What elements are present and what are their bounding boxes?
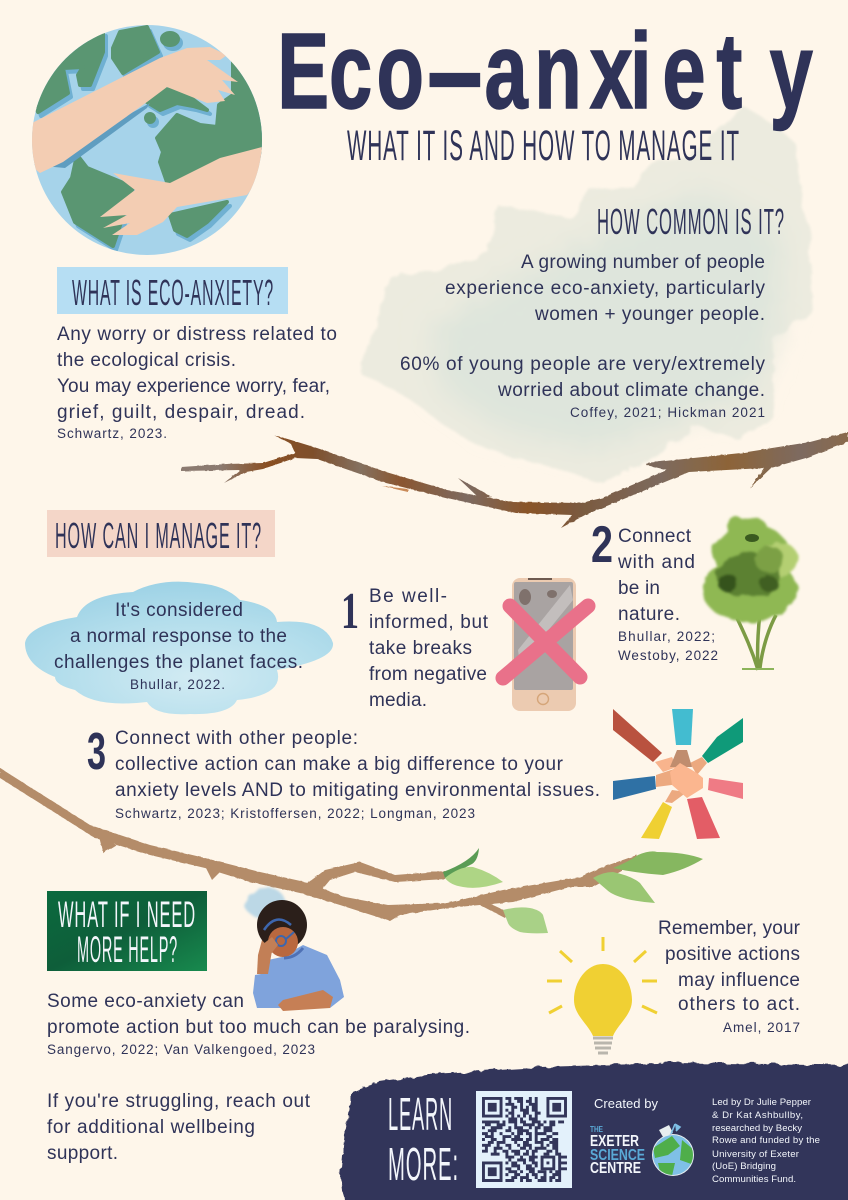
icon: tree bbox=[702, 516, 798, 670]
panel: cloud callout bbox=[25, 582, 333, 714]
text: remember: Remember, your bbox=[658, 918, 801, 939]
panel: cloud callout: challenges the planet faces. bbox=[54, 652, 303, 673]
step 3: Schwartz, 2023; Kristoffersen, 2022; Longman, 2023 bbox=[115, 806, 475, 821]
panel: what if I need more help: MORE HELP? bbox=[77, 929, 178, 970]
icon: circle of hands bbox=[613, 709, 743, 839]
text: credits: (UoE) Bridging bbox=[712, 1161, 776, 1172]
text: remember: may influence bbox=[678, 970, 800, 991]
step 1: media. bbox=[369, 690, 427, 711]
text: credits bbox=[712, 1097, 820, 1185]
text: reach out: for additional wellbeing bbox=[47, 1117, 255, 1138]
panel: cloud callout: It's considered bbox=[115, 600, 243, 621]
step 2: Connect bbox=[618, 526, 692, 547]
panel: how can I manage it bbox=[47, 510, 275, 557]
panel: what is eco-anxiety bbox=[57, 267, 288, 314]
step 3: collective action can make a big difference to your bbox=[115, 754, 564, 775]
text: how common: 60% of young people are very/extremely bbox=[400, 354, 766, 375]
step 1: take breaks bbox=[369, 638, 472, 659]
text: how common: experience eco-anxiety, particularly bbox=[445, 278, 766, 299]
step 2: with and bbox=[617, 552, 695, 573]
step 1: from negative bbox=[369, 664, 487, 685]
panel: footer bbox=[340, 1063, 848, 1200]
text: credits: & Dr Kat Ashbullby, bbox=[712, 1110, 803, 1121]
title: - bbox=[424, 10, 486, 131]
text: reach out: If you're struggling, reach out bbox=[47, 1091, 311, 1112]
text: how common: Coffey, 2021; Hickman 2021 bbox=[570, 405, 765, 420]
text: how common: women + younger people. bbox=[534, 304, 765, 325]
panel: cloud callout: a normal response to the bbox=[70, 626, 287, 647]
text: remember: others to act. bbox=[678, 994, 800, 1015]
text: credits: researched by Becky bbox=[712, 1123, 802, 1134]
icon: light bulb bbox=[547, 937, 657, 1053]
step 3 bbox=[87, 723, 600, 821]
heading: learn more bbox=[388, 1088, 459, 1190]
panel: footer: LEARN bbox=[388, 1088, 453, 1140]
text: more help bbox=[47, 991, 470, 1057]
step 2: Westoby, 2022 bbox=[618, 648, 718, 663]
text: definition: Schwartz, 2023. bbox=[57, 426, 167, 441]
text: HOW CAN I MANAGE IT? bbox=[55, 515, 262, 556]
step 1: informed, but bbox=[369, 612, 489, 633]
text: reach out bbox=[47, 1091, 311, 1164]
title: anxiety bbox=[485, 10, 813, 131]
step 2 bbox=[591, 516, 718, 663]
title bbox=[277, 10, 813, 131]
text: WHAT IF I NEED bbox=[58, 894, 196, 935]
text: WHAT IS ECO-ANXIETY? bbox=[72, 272, 274, 313]
step 3: Connect with other people: bbox=[115, 728, 358, 749]
text: remember bbox=[658, 918, 801, 1035]
step 1 bbox=[341, 583, 489, 711]
step 2: Bhullar, 2022; bbox=[618, 629, 715, 644]
panel: what if I need more help bbox=[47, 891, 207, 971]
text: remember: Amel, 2017 bbox=[723, 1020, 800, 1035]
upper branch bbox=[181, 432, 848, 528]
panel: cloud callout: Bhullar, 2022. bbox=[130, 677, 225, 692]
text: definition: the ecological crisis. bbox=[57, 350, 236, 371]
watercolour wash behind "how common is it" bbox=[360, 105, 812, 483]
text: definition bbox=[57, 324, 337, 441]
text: more help: Some eco-anxiety can bbox=[47, 991, 244, 1012]
numeral 2: 2 bbox=[591, 516, 613, 574]
step 2: nature. bbox=[618, 604, 680, 625]
text: remember: positive actions bbox=[665, 944, 800, 965]
title: Eco bbox=[277, 10, 424, 131]
step 1: Be well- bbox=[369, 586, 447, 607]
text: how common bbox=[400, 252, 766, 420]
text: credits: Communities Fund. bbox=[712, 1174, 796, 1185]
logo: The Exeter Science Centre: CENTRE bbox=[590, 1160, 641, 1177]
text: definition: You may experience worry, fear, bbox=[57, 376, 330, 397]
logo: The Exeter Science Centre bbox=[590, 1124, 694, 1177]
cloud shape bbox=[25, 582, 333, 714]
icon: phone crossed out bbox=[503, 578, 588, 711]
heading: what if I need more help bbox=[58, 894, 196, 970]
numeral 3: 3 bbox=[87, 723, 106, 781]
text: credits: University of Exeter bbox=[712, 1149, 800, 1160]
numeral 1: 1 bbox=[341, 583, 359, 640]
text: credits: Led by Dr Julie Pepper bbox=[712, 1097, 812, 1108]
illustration: person with head in hand bbox=[244, 888, 344, 1011]
step 3: anxiety levels AND to mitigating environmental issues. bbox=[115, 780, 600, 801]
logo: The Exeter Science Centre: SCIENCE bbox=[590, 1147, 645, 1164]
text: credits: Rowe and funded by the bbox=[712, 1135, 820, 1146]
logo: The Exeter Science Centre: EXETER bbox=[590, 1133, 639, 1150]
text: how common: worried about climate change. bbox=[497, 380, 765, 401]
text: how common: A growing number of people bbox=[521, 252, 765, 273]
lower branch bbox=[0, 768, 638, 921]
text: more help: Sangervo, 2022; Van Valkengoed, 2023 bbox=[47, 1042, 315, 1057]
step 2: be in bbox=[618, 578, 660, 599]
text: definition: grief, guilt, despair, dread. bbox=[57, 402, 305, 423]
text: reach out: support. bbox=[47, 1143, 118, 1164]
text: created by: Created by bbox=[594, 1096, 658, 1111]
QR code bbox=[476, 1091, 572, 1188]
illustration: arms hugging the globe bbox=[28, 22, 269, 258]
text: definition: Any worry or distress related to bbox=[57, 324, 337, 345]
leaves bbox=[443, 848, 703, 933]
panel: footer: MORE: bbox=[388, 1138, 459, 1190]
text: more help: promote action but too much can be paralysing. bbox=[47, 1017, 470, 1038]
logo: The Exeter Science Centre: THE bbox=[590, 1124, 603, 1134]
